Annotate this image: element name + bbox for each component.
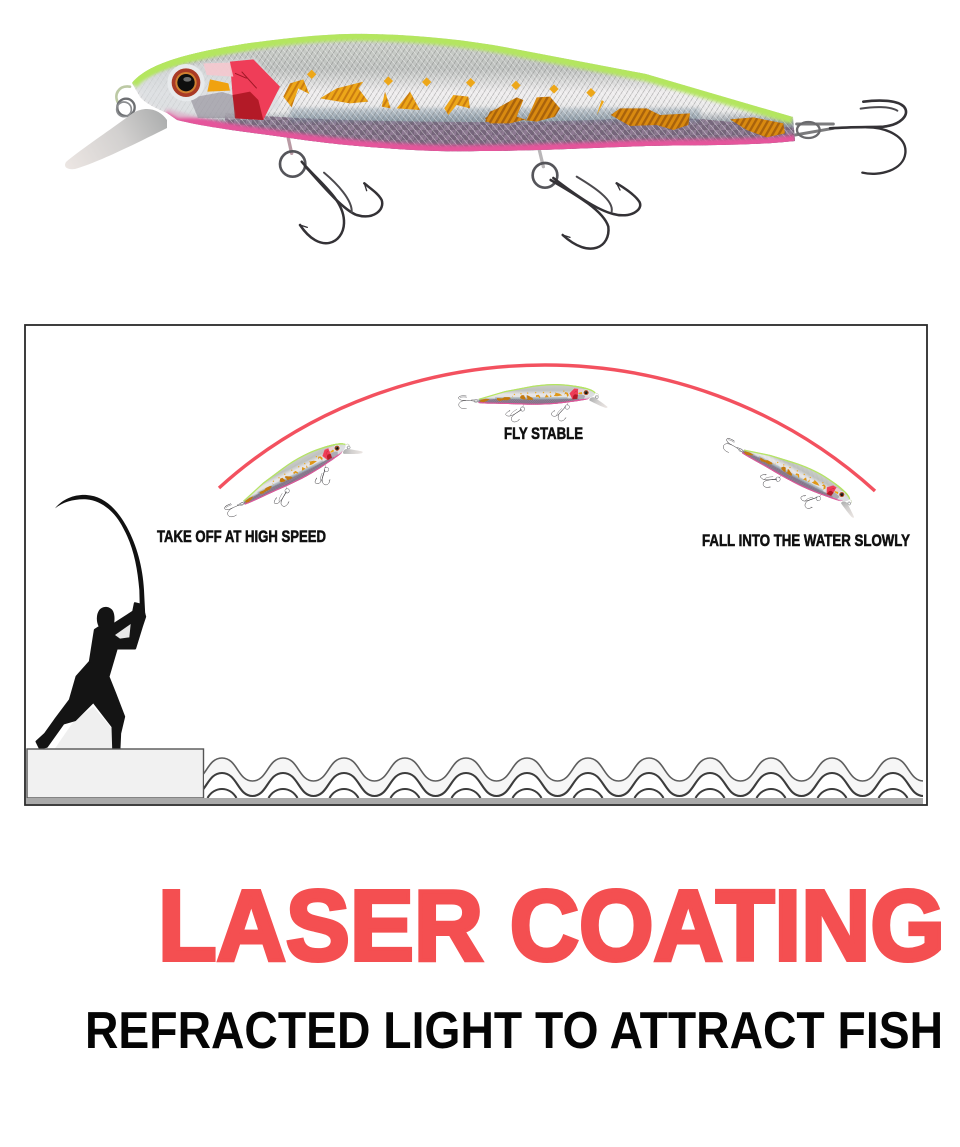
lure: take off [218,430,369,530]
flight arc [219,365,875,491]
label: fly stable: FLY STABLE [504,424,583,443]
panel: casting flight diagram [25,325,927,805]
label: take off at high speed: TAKE OFF AT HIGH SPEED [157,527,326,546]
heading: laser coating: LASER COATING [158,870,945,982]
product photo: laser coated minnow lure [65,30,906,249]
angler silhouette with bent rod [37,495,145,748]
quay platform [27,749,204,798]
lure: fly stable [459,383,608,422]
water waves [204,750,923,798]
lure: falling [716,426,865,531]
quay base bar [26,798,923,804]
